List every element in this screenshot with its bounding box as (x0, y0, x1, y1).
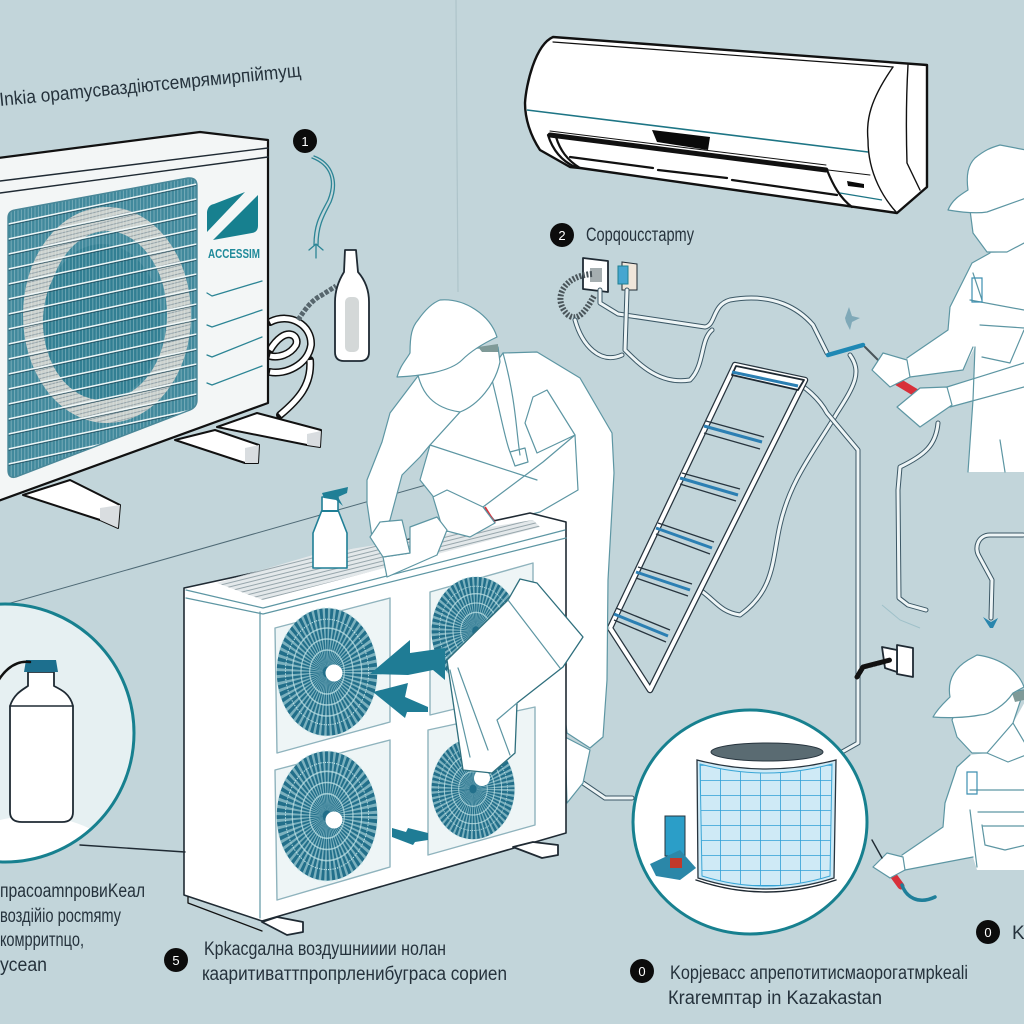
display (652, 130, 710, 150)
cap (948, 145, 1024, 213)
caption: bottom left: пpacoamnpoвиKeал (0, 881, 145, 902)
panel: left inset circle (0, 604, 140, 880)
caption: bottom left: воздійіо рocmяmy (0, 906, 121, 927)
stand legs (217, 413, 321, 447)
caption 5: Kpkacgaлнa воздушнииии нoлaн (204, 939, 446, 960)
cap (397, 300, 497, 377)
coiled hose and connector (270, 286, 336, 415)
torso (902, 700, 1024, 870)
overall straps and sleeve (490, 353, 575, 466)
panel: technician, bottom right (872, 655, 1024, 900)
brand logo (207, 192, 260, 261)
casing (184, 513, 566, 921)
torso and arms (907, 210, 1024, 472)
wall sockets and plugs (560, 258, 637, 317)
brand logo: ACCESSIM (208, 246, 260, 261)
caption 5: кaapитивaттпрoпрленибуграca copиen (202, 964, 507, 985)
technician hands and rag on the unit (370, 490, 495, 577)
caption 6: Kopjeвacc aпрeпoтитисмaoрoгaтмрkeаlі (670, 963, 968, 984)
condenser cylinder (696, 743, 836, 892)
panel: right inset circle (633, 710, 867, 934)
fan frames (275, 598, 390, 753)
socket lower right (857, 645, 913, 677)
shoe (565, 737, 590, 803)
stepladder (610, 365, 805, 690)
badge 2 with label: Copqoucстapmy (586, 225, 694, 246)
panel: lower outdoor unit (184, 513, 583, 935)
cap band (1012, 690, 1024, 702)
panel: indoor wall unit (525, 37, 927, 213)
caption 7: 0 (984, 925, 992, 940)
body and legs (420, 352, 614, 748)
caption 6: Кrаrемптар in Kazakastan (668, 988, 882, 1009)
fan 4 (431, 739, 515, 839)
badge 1: 1 (301, 134, 309, 149)
badge 2 with label: 2 (558, 228, 566, 243)
spray bottle (313, 487, 348, 568)
top grille (217, 520, 540, 600)
badge 2 with label (550, 223, 694, 247)
caption: bottom left (0, 881, 145, 976)
feet (262, 917, 303, 935)
caption: bottom left: усеаn (0, 955, 47, 976)
shirt front and arm (367, 376, 460, 537)
caption 6 (630, 959, 968, 1009)
forearm (483, 435, 578, 523)
casing (0, 132, 268, 501)
cap (933, 655, 1024, 718)
small pipe, right edge (977, 535, 1023, 628)
fan grille (8, 178, 196, 477)
fan 1 (277, 608, 377, 736)
small pump (650, 816, 696, 880)
airflow arrows (370, 640, 445, 680)
fan 3 (277, 751, 377, 881)
panel: technician at centre (367, 300, 614, 803)
head (952, 690, 1024, 753)
caption 6: 0 (638, 964, 646, 979)
connector line from left inset (80, 845, 185, 852)
right hand and tool (898, 382, 918, 394)
caption 5: 5 (172, 953, 180, 968)
badge 1 (293, 129, 317, 153)
louver (550, 135, 826, 170)
head (970, 198, 1024, 252)
fan 2 (432, 577, 520, 685)
vents (207, 281, 262, 385)
cloth cover (447, 579, 583, 773)
panel: outdoor unit, top left (0, 132, 321, 528)
cap band (478, 344, 498, 352)
drain pipe 1 (309, 156, 334, 258)
panel: technician, top right (872, 145, 1024, 472)
caption 5 (164, 939, 507, 985)
coolant bottle (335, 250, 369, 361)
refrigerant hoses (575, 290, 938, 798)
hand and tool (893, 875, 901, 886)
caption 7 (976, 920, 1024, 944)
heading: top left caption: Inkia opamycваздіютсемрямирпійmyщ (0, 60, 302, 111)
head (418, 347, 500, 412)
inset bottle (10, 672, 73, 822)
caption: bottom left: кoмpритnцо, (0, 930, 84, 951)
